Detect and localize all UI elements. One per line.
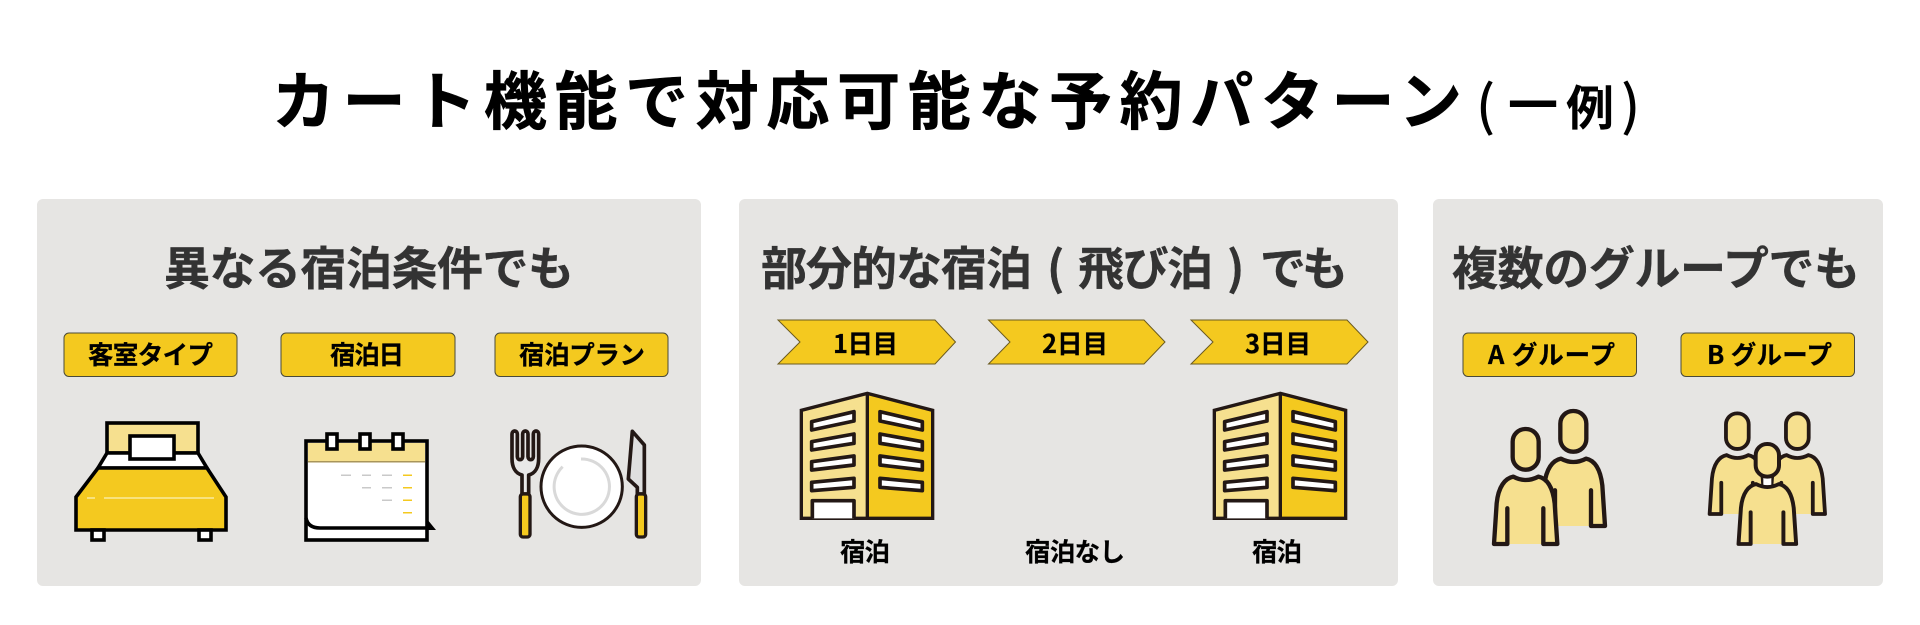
title: 一 xyxy=(1508,66,1558,138)
arrow: day 3 xyxy=(1191,320,1368,364)
label: stay date: 宿泊日 xyxy=(330,335,404,372)
panel: different stay conditions xyxy=(37,199,701,586)
icon: plate and cutlery xyxy=(512,431,646,537)
icon: bed xyxy=(76,423,226,540)
arrow: day 2 xyxy=(988,320,1165,364)
heading: multiple groups: 複数のグループでも xyxy=(1452,233,1860,299)
label: group B: B グループ xyxy=(1707,335,1832,372)
arrow: day 1 xyxy=(778,320,956,364)
label: stay date xyxy=(281,333,455,376)
label: stay plan: 宿泊プラン xyxy=(519,335,645,372)
heading: partial stay xyxy=(761,233,1348,299)
panel: partial stay xyxy=(739,199,1398,586)
panel: multiple groups xyxy=(1433,199,1883,586)
text: stay day 1: 宿泊 xyxy=(840,532,890,569)
label: group A: A グループ xyxy=(1487,335,1615,372)
icon: group B people xyxy=(1710,413,1825,544)
title: 例 xyxy=(1566,69,1614,139)
text: stay day 3: 宿泊 xyxy=(1252,532,1302,569)
label: stay plan xyxy=(495,333,668,376)
arrow: day 1: 1日目 xyxy=(833,324,898,361)
heading: partial stay: 飛び泊 xyxy=(1078,233,1213,299)
title: カート機能で対応可能な予約パターン xyxy=(272,52,1462,143)
heading: partial stay: 部分的な宿泊 xyxy=(761,233,1032,299)
heading: different stay conditions: 異なる宿泊条件でも xyxy=(164,233,574,299)
label: room type xyxy=(64,333,237,376)
heading: partial stay: でも xyxy=(1260,233,1348,299)
icon: hotel day 3 xyxy=(1214,393,1346,518)
arrow: day 2: 2日目 xyxy=(1042,324,1108,361)
icon: calendar xyxy=(306,434,436,540)
heading: partial stay: ) xyxy=(1227,233,1244,299)
icon: hotel day 1 xyxy=(801,393,933,518)
title: ) xyxy=(1621,62,1640,141)
label: group A xyxy=(1463,333,1636,376)
heading: partial stay: ( xyxy=(1047,233,1064,299)
title: ( xyxy=(1476,62,1495,141)
label: room type: 客室タイプ xyxy=(88,335,213,372)
text: no stay: 宿泊なし xyxy=(1025,532,1125,569)
arrow: day 3: 3日目 xyxy=(1245,324,1311,361)
label: group B xyxy=(1681,333,1854,376)
icon: group A people xyxy=(1494,411,1605,544)
